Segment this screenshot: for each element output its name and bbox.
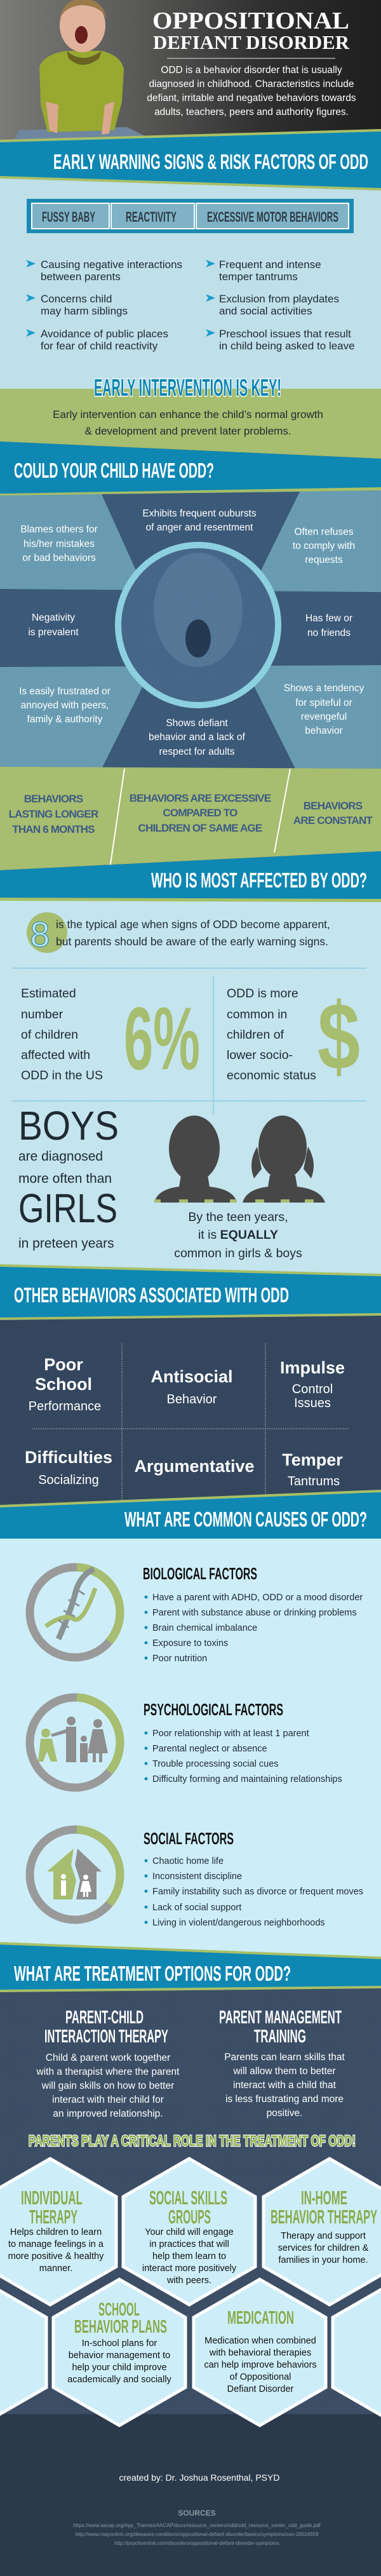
panel: other behaviors grid: Temper: [282, 1450, 343, 1469]
panel: other behaviors grid: Impulse: [280, 1358, 345, 1377]
treatment: parent management training: will allow them to better: [232, 2066, 336, 2077]
stat: 6 percent: 6%: [124, 988, 200, 1088]
cause: psychological: Parental neglect or absence: [152, 1744, 267, 1754]
panel: other behaviors grid: Behavior: [167, 1393, 217, 1406]
banner: could your child have ODD: [0, 442, 381, 497]
panel: could your child have ODD signs: [0, 490, 381, 770]
hex: school behavior plans: academically and socially: [67, 2375, 172, 2385]
hex: in-home behavior therapy: services for children &: [278, 2243, 369, 2253]
hex: social skills groups: SOCIAL SKILLS: [149, 2187, 227, 2209]
sign texts: of anger and resentment: [146, 522, 253, 533]
stat: socio-economic: ODD is more: [227, 987, 298, 1001]
credit: created by: Dr. Joshua Rosenthal, PSYD: [119, 2472, 279, 2483]
panel: other behaviors grid: Poor: [44, 1355, 83, 1374]
sign texts: respect for adults: [159, 746, 235, 757]
stat: typical age 8: 8: [30, 914, 50, 954]
cause: psychological: Difficulty forming and maintaining relationships: [152, 1774, 342, 1784]
intro text: [147, 65, 356, 118]
panel: diagnostic criteria: [0, 767, 381, 870]
hex: social skills groups: GROUPS: [168, 2206, 211, 2228]
warning sign bullets: [26, 259, 355, 352]
sign texts: annoyed with peers,: [21, 700, 109, 711]
sign texts: behavior and a lack of: [149, 732, 246, 743]
cause: biological: [30, 1564, 363, 1664]
treatment: parent-child interaction therapy: an improved relationship.: [53, 2108, 163, 2119]
text: equally common: common in girls & boys: [174, 1246, 302, 1260]
panel: diagnostic criteria: ARE CONSTANT: [293, 814, 373, 826]
hex: individual therapy: [8, 2187, 104, 2274]
treatment: parent management training: is less frustrating and more: [225, 2094, 344, 2105]
cause: psychological: Trouble processing social cues: [152, 1759, 279, 1769]
sign texts: no friends: [307, 628, 351, 638]
warning sign bullets: for fear of child reactivity: [41, 340, 158, 352]
stat: socio-economic: common in: [227, 1008, 287, 1022]
text: equally common: [174, 1210, 302, 1260]
icon: family ring: [30, 1697, 120, 1788]
cause: social: Chaotic home life: [152, 1856, 224, 1866]
banner: early warning signs: [0, 129, 381, 191]
hex: medication: Medication when combined: [204, 2336, 316, 2346]
sources: https://www.aacap.org/App_Themes/AACAP/docs/resource_centers/odd/odd_resource_center_odd_guide.pdf: [73, 2523, 321, 2528]
risk factor boxes: [27, 199, 354, 233]
hex: social skills groups: with peers.: [166, 2276, 211, 2286]
warning sign bullets: Preschool issues that result: [219, 328, 351, 340]
hex: social skills groups: interact more positively: [142, 2263, 237, 2274]
panel: other behaviors grid: School: [35, 1375, 92, 1394]
treatment: parent management training: positive.: [267, 2108, 302, 2119]
light blue background: warning section: [0, 165, 381, 394]
cause: biological: BIOLOGICAL FACTORS: [143, 1564, 257, 1583]
hex: in-home behavior therapy: [271, 2187, 377, 2265]
sources: http://www.mayoclinic.org/diseases-conditions/oppositional-defiant-disorder/basics/symptoms/con-20024559: [76, 2532, 319, 2537]
stat: typical age 8: is the typical age when signs of ODD become apparent,: [56, 918, 330, 931]
hex: individual therapy: THERAPY: [29, 2206, 77, 2228]
hex: school behavior plans: help your child improve: [72, 2363, 167, 2373]
warning sign bullets: in child being asked to leave: [219, 340, 355, 352]
hex: medication: Defiant Disorder: [227, 2384, 294, 2394]
hex: medication: with behavioral therapies: [209, 2348, 311, 2358]
cause: social: Lack of social support: [152, 1903, 241, 1913]
sign texts: to comply with: [293, 541, 355, 551]
cause: biological: Exposure to toxins: [152, 1638, 228, 1649]
stat: boys vs girls: are diagnosed: [18, 1149, 103, 1164]
warning sign bullets: between parents: [41, 271, 121, 283]
cause: biological: Parent with substance abuse or drinking problems: [152, 1608, 357, 1618]
hex: school behavior plans: BEHAVIOR PLANS: [74, 2317, 167, 2337]
banner: could your child have ODD: COULD YOUR CHILD HAVE ODD?: [14, 459, 214, 482]
stat: socio-economic: $: [318, 983, 360, 1089]
hex: social skills groups: help them learn to: [152, 2251, 226, 2262]
hex: medication: MEDICATION: [227, 2308, 294, 2328]
banner: who is most affected: [0, 851, 381, 902]
sign texts: [19, 508, 364, 757]
treatment: parent-child interaction therapy: [36, 2007, 180, 2119]
hex: individual therapy: to manage feelings in a: [8, 2239, 104, 2249]
hex: individual therapy: INDIVIDUAL: [21, 2187, 83, 2209]
warning sign bullets: may harm siblings: [41, 305, 128, 317]
icon: boy and girl silhouettes: [154, 1116, 325, 1203]
early intervention panel: Early intervention can enhance the child’s normal growth: [53, 408, 323, 421]
cause: social: Living in violent/dangerous neighborhoods: [152, 1918, 325, 1928]
stat: boys vs girls: [18, 1103, 119, 1251]
panel: other behaviors grid: Difficulties: [25, 1448, 112, 1467]
hex: individual therapy: manner.: [39, 2263, 72, 2274]
sources: http://psychcentral.com/disorders/oppositional-defiant-disorder-symptoms: [114, 2540, 279, 2546]
hex: medication: can help improve behaviors: [204, 2360, 317, 2370]
treatment: parent management training: Parents can learn skills that: [224, 2052, 345, 2063]
hex: individual therapy: more positive & healthy: [8, 2251, 104, 2262]
text: equally common: it is EQUALLY: [198, 1228, 278, 1242]
sign texts: Has few or: [305, 613, 352, 624]
warning sign bullets: Exclusion from playdates: [219, 293, 339, 305]
sources: SOURCES: [178, 2509, 216, 2518]
sign texts: Shows defiant: [166, 718, 228, 729]
stat: socio-economic: lower socio-: [227, 1048, 293, 1062]
early intervention panel: & development and prevent later problems.: [84, 425, 291, 437]
title: OPPOSITIONAL: [152, 8, 349, 34]
hex: medication: [204, 2308, 317, 2394]
panel: causes background: [0, 1539, 381, 1958]
title: DEFIANT DISORDER: [153, 31, 350, 53]
stat: 6 percent: of children: [21, 1028, 78, 1042]
panel: other behaviors grid: Control: [292, 1382, 333, 1396]
stat: typical age 8: [27, 912, 330, 954]
stat: typical age 8: but parents should be aware of the early warning signs.: [56, 935, 328, 948]
sign texts: Is easily frustrated or: [19, 686, 110, 697]
sources: [73, 2509, 321, 2546]
sign texts: Often refuses: [294, 527, 354, 537]
illustration: screaming boy: [13, 0, 146, 145]
sign texts: Shows a tendency: [284, 683, 364, 694]
cause: biological: Brain chemical imbalance: [152, 1623, 257, 1633]
banner: other behaviors: [0, 1264, 381, 1318]
panel: diagnostic criteria: CHILDREN OF SAME AGE: [138, 822, 262, 834]
treatment: parent-child interaction therapy: INTERACTION THERAPY: [44, 2026, 168, 2047]
risk factor boxes: REACTIVITY: [126, 209, 177, 225]
panel: other behaviors grid: Performance: [29, 1399, 101, 1413]
cause: psychological: [30, 1697, 342, 1788]
stat: socio-economic: economic status: [227, 1069, 316, 1082]
hex: medication: of Oppositional: [230, 2372, 291, 2382]
treatment: parent management training: TRAINING: [254, 2026, 306, 2047]
treatment: parent management training: [219, 2007, 345, 2119]
cause: social: SOCIAL FACTORS: [144, 1829, 234, 1848]
sign texts: family & authority: [27, 714, 103, 725]
early intervention panel: [0, 375, 381, 459]
warning sign bullets: temper tantrums: [219, 271, 298, 283]
cause: social: Inconsistent discipline: [152, 1871, 242, 1882]
sign texts: behavior: [305, 725, 343, 736]
cause: biological: Poor nutrition: [152, 1654, 207, 1664]
hex: social skills groups: in practices that will: [149, 2239, 229, 2249]
light blue background: who is affected: [0, 896, 381, 1277]
intro text: ODD is a behavior disorder that is usually: [161, 65, 342, 76]
banner: common causes: [0, 1490, 381, 1539]
header photo panel: [0, 0, 381, 146]
sign texts: or bad behaviors: [22, 553, 96, 563]
sign texts: Exhibits frequent oubursts: [142, 508, 257, 519]
panel: other behaviors grid: Issues: [294, 1396, 331, 1410]
panel: diagnostic criteria: BEHAVIORS ARE EXCESSIVE: [130, 792, 271, 804]
stat: boys vs girls: GIRLS: [18, 1185, 117, 1231]
icon: DNA ring: [30, 1567, 120, 1657]
panel: other behaviors grid: Tantrums: [288, 1474, 340, 1488]
stat: 6 percent: Estimated: [21, 987, 76, 1001]
cause: psychological: Poor relationship with at least 1 parent: [152, 1729, 309, 1739]
banner: treatment options: [0, 1942, 381, 1992]
panel: diagnostic criteria: LASTING LONGER: [9, 808, 98, 820]
stat: boys vs girls: more often than: [18, 1171, 112, 1186]
stat: socio-economic: children of: [227, 1028, 284, 1042]
cause: psychological: PSYCHOLOGICAL FACTORS: [144, 1700, 283, 1719]
treatment: parent-child interaction therapy: will gain skills on how to better: [41, 2080, 174, 2091]
treatment: parent-child interaction therapy: PARENT-CHILD: [65, 2007, 144, 2028]
treatment: parent-child interaction therapy: with a therapist where the parent: [36, 2067, 180, 2077]
sign texts: for spiteful or: [295, 698, 352, 708]
risk factor boxes: FUSSY BABY: [42, 209, 95, 225]
stat: 6 percent: affected with: [21, 1048, 90, 1062]
panel: other behaviors grid: Antisocial: [150, 1367, 233, 1386]
panel: other behaviors grid: Argumentative: [134, 1457, 255, 1476]
treatment: parent-child interaction therapy: Child & parent work together: [46, 2053, 170, 2063]
panel: diagnostic criteria: COMPARED TO: [163, 807, 237, 819]
intro text: defiant, irritable and negative behaviors towards: [147, 93, 356, 104]
hex: school behavior plans: SCHOOL: [98, 2300, 140, 2320]
panel: diagnostic criteria: BEHAVIORS: [304, 800, 363, 812]
panel: diagnostic criteria: THAN 6 MONTHS: [12, 823, 95, 835]
cause: biological: Have a parent with ADHD, ODD or a mood disorder: [152, 1593, 363, 1603]
cause: social: Family instability such as divorce or frequent moves: [152, 1887, 363, 1897]
stat: socio-economic: [227, 983, 360, 1089]
text: equally common: By the teen years,: [188, 1210, 288, 1224]
hex: social skills groups: Your child will engage: [145, 2227, 234, 2237]
stat: 6 percent: number: [21, 1008, 64, 1022]
panel: diagnostic criteria: BEHAVIORS: [24, 793, 83, 805]
icon: broken house ring: [30, 1830, 120, 1920]
sign texts: Negativity: [32, 612, 75, 623]
hex: school behavior plans: In-school plans for: [82, 2338, 157, 2349]
hex: in-home behavior therapy: Therapy and support: [281, 2231, 366, 2241]
warning sign bullets: Frequent and intense: [219, 259, 321, 271]
warning sign bullets: Avoidance of public places: [41, 328, 168, 340]
panel: other behaviors grid: [0, 1313, 381, 1513]
sign texts: Blames others for: [20, 524, 98, 535]
sign texts: requests: [305, 555, 343, 565]
hex: in-home behavior therapy: families in your home.: [278, 2255, 368, 2265]
treatment: parent-child interaction therapy: interact with their child for: [52, 2094, 164, 2105]
sign texts: revengeful: [301, 711, 347, 722]
panel: treatment background: [0, 1985, 381, 2576]
hex: school behavior plans: behavior management to: [69, 2350, 170, 2361]
hex: social skills groups: [142, 2187, 237, 2286]
hex: individual therapy: Helps children to learn: [10, 2227, 102, 2237]
title: [152, 8, 350, 53]
intro text: diagnosed in childhood. Characteristics include: [149, 79, 354, 90]
stat: 6 percent: [21, 987, 200, 1088]
treatment: parent management training: interact with a child that: [233, 2080, 337, 2091]
panel: other behaviors grid: Socializing: [38, 1473, 99, 1487]
sign texts: his/her mistakes: [23, 539, 95, 550]
hex: school behavior plans: [67, 2300, 172, 2385]
warning sign bullets: Concerns child: [41, 293, 112, 305]
hexagon grid: [0, 2159, 381, 2425]
warning sign bullets: Causing negative interactions: [41, 259, 182, 271]
cause: social: [30, 1829, 363, 1928]
stat: boys vs girls: BOYS: [18, 1103, 119, 1149]
stat: 6 percent: ODD in the US: [21, 1069, 103, 1082]
stat: boys vs girls: in preteen years: [18, 1236, 114, 1251]
sign texts: is prevalent: [28, 627, 79, 638]
warning sign bullets: and social activities: [219, 305, 312, 317]
intro text: adults, teachers, peers and authority figures.: [154, 107, 349, 118]
